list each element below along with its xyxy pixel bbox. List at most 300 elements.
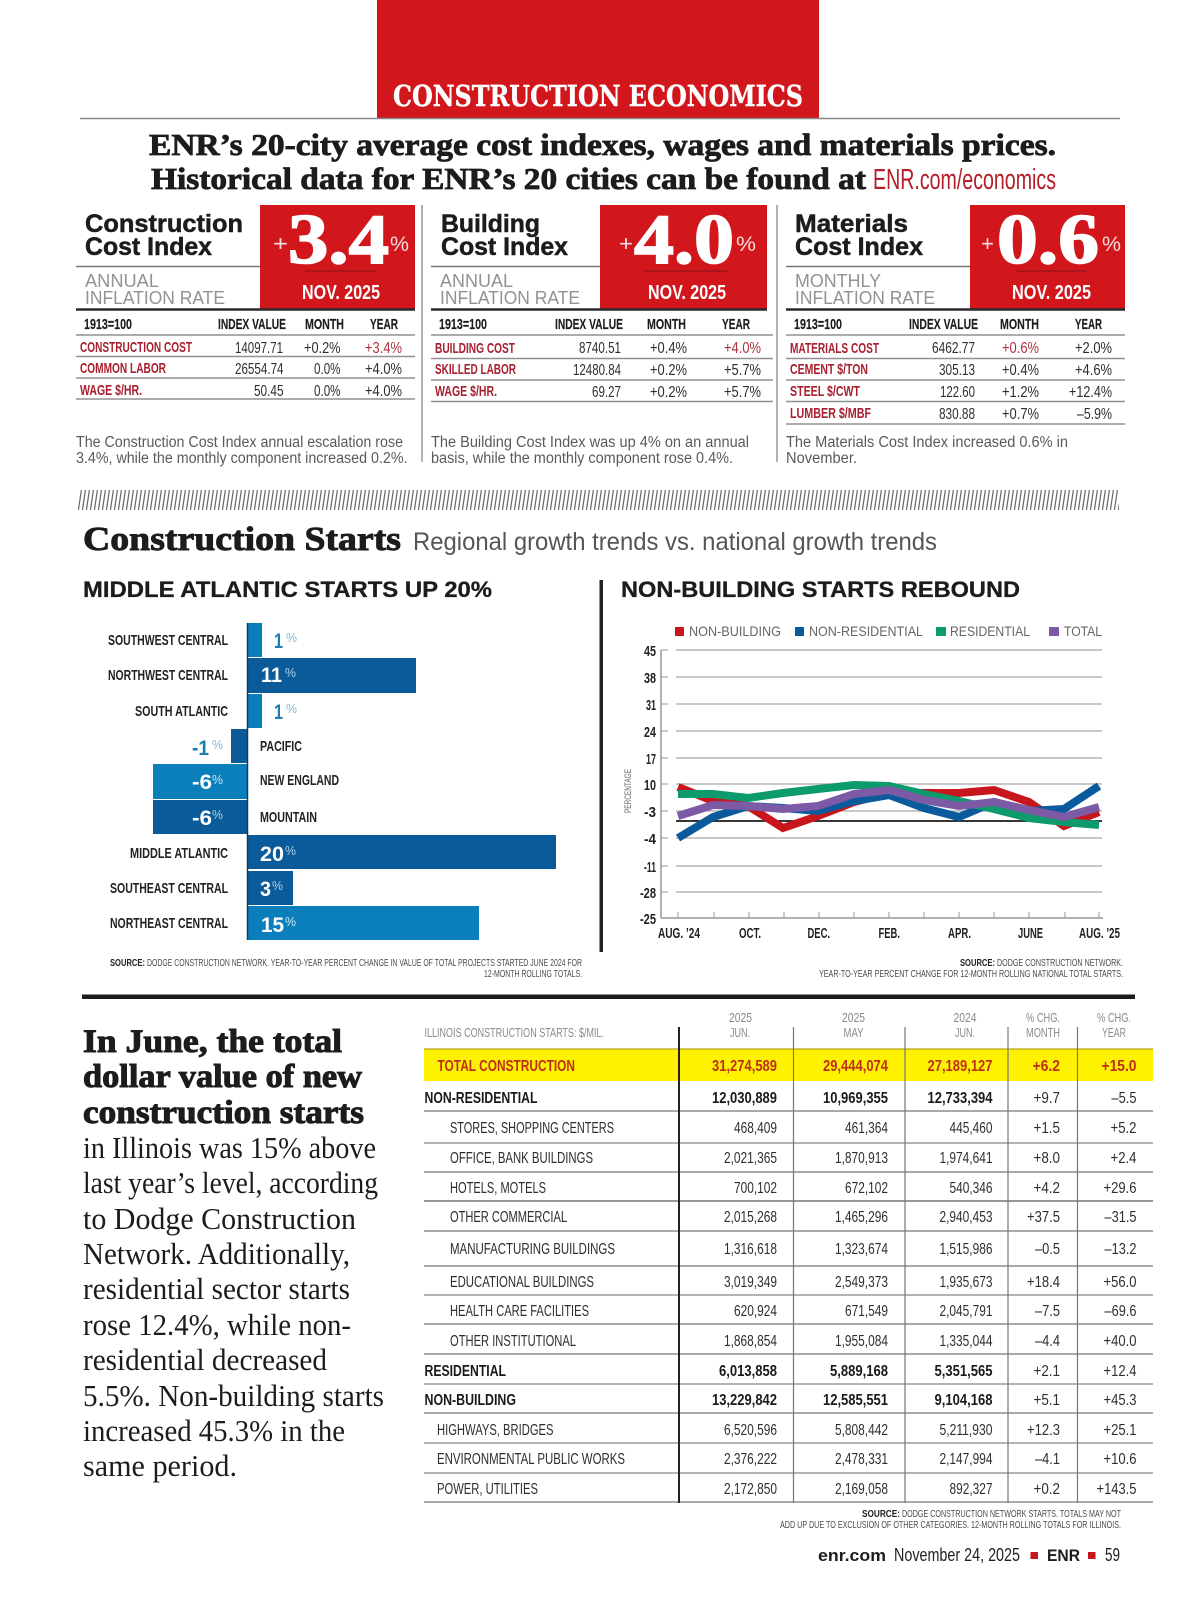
callout: +0.6% Nov. 2025 [970,201,1125,310]
data table: construction cost: MONTH [305,316,344,333]
data table: materials cost: 305.13 [939,362,975,379]
row: residential: +2.1 [1034,1363,1060,1380]
data table: materials cost: INDEX VALUE [909,316,978,333]
text block: Illinois summary [83,1024,384,1483]
callout: +3.4% Nov. 2025: NOV. 2025 [302,282,380,304]
data table: building cost: +4.0% [724,340,761,357]
data table: materials cost: MONTH [1000,316,1039,333]
table header: % CHG. [1097,1010,1131,1025]
data table: materials cost: +12.4% [1069,384,1112,401]
rate label: annual inflation rate [85,270,225,308]
callout: +0.6% Nov. 2025: 0.6 [997,201,1099,279]
source: bar chart: DODGE CONSTRUCTION NETWORK. YEAR-TO-YEAR PERCENT CHANGE IN VALUE OF TOTAL PROJECTS STARTED JUNE 2024 FOR [147,957,582,969]
source: bar chart: SOURCE: [110,957,145,969]
text block: Illinois summary: in Illinois was 15% above [83,1130,376,1165]
data table: building cost: SKILLED LABOR [435,361,516,378]
row: hotels [450,1180,1137,1197]
bar chart: regional starts: -6 [192,771,212,794]
row: hotels: 700,102 [734,1180,777,1197]
rate label: annual inflation rate [440,270,580,308]
table rules [424,1027,1153,1503]
panel: building cost index [431,201,773,467]
row: power: 2,172,850 [724,1481,777,1498]
bar chart: regional starts: % [272,878,283,893]
footer: ENR [1047,1546,1080,1565]
row: office: 1,974,641 [940,1150,993,1167]
row: other commercial: –31.5 [1104,1209,1137,1226]
bar chart: regional starts: % [286,701,297,716]
data table: building cost: +0.2% [650,384,687,401]
row: non-building: NON-BUILDING [424,1392,516,1409]
bar chart: regional starts: 20 [260,843,284,866]
bar chart: regional starts: 1 [274,701,283,724]
callout: +0.6% Nov. 2025: % [1102,233,1121,256]
row: non-residential: 12,030,889 [712,1090,777,1107]
bar chart: regional starts: NORTHWEST CENTRAL [108,667,228,684]
data table: construction cost: 14097.71 [235,340,283,357]
row: environmental: +10.6 [1104,1451,1137,1468]
headline: Historical data for ENR’s 20 cities can be found at [151,161,867,196]
row: environmental [437,1451,1137,1468]
panel title: building cost index: Cost Index [441,233,568,261]
data table: construction cost: +0.2% [304,340,340,357]
bar chart: regional starts: % [212,772,223,787]
line chart: national starts: AUG. ’25 [1079,926,1120,942]
panel title: building cost index [441,210,568,261]
source: line chart [819,957,1123,980]
data table: building cost: +0.4% [650,340,687,357]
section banner: construction economics: CONSTRUCTION ECONOMICS [393,79,803,113]
row: residential: 5,351,565 [934,1363,993,1380]
callout: +4.0% Nov. 2025: 4.0 [634,201,734,279]
line chart: national starts: DEC. [808,926,830,942]
data table: building cost: INDEX VALUE [555,316,623,333]
text block: Illinois summary: Network. Additionally, [83,1236,350,1271]
table header [424,1010,1131,1040]
row: non-building: 9,104,168 [934,1392,993,1409]
row: environmental: 2,376,222 [724,1451,777,1468]
table header: % CHG. [1026,1010,1060,1025]
callout: +4.0% Nov. 2025: + [619,231,633,256]
row: non-building: +45.3 [1104,1392,1137,1409]
bar chart: regional starts: SOUTHEAST CENTRAL [110,880,228,897]
row: non-residential: 12,733,394 [928,1090,993,1107]
text block: Illinois summary: to Dodge Construction [83,1201,356,1236]
line chart: national starts: -4 [644,832,656,848]
bar chart: regional starts: 3 [260,878,271,901]
row: manufacturing: MANUFACTURING BUILDINGS [450,1241,615,1258]
row: health care: –7.5 [1035,1303,1060,1320]
highlighted row: total construction: +6.2 [1032,1058,1060,1075]
row: hotels: HOTELS, MOTELS [450,1180,546,1197]
row: other institutional [450,1333,1137,1350]
bar chart: regional starts: 1 [274,630,283,653]
line chart: national starts [623,644,1120,942]
row: educational: +18.4 [1027,1274,1060,1291]
table header: 2025 [842,1010,865,1025]
table header: YEAR [1102,1025,1126,1040]
data table: materials cost: 830.88 [939,406,975,423]
row: highways: +25.1 [1104,1422,1137,1439]
row: residential: +12.4 [1104,1363,1137,1380]
bar chart: regional starts: MOUNTAIN [260,809,317,826]
table header: JUN. [955,1025,975,1040]
line chart: national starts: 45 [644,644,656,660]
row: manufacturing [450,1241,1137,1258]
legend: line chart: TOTAL [1064,623,1102,639]
bar chart: regional starts: PACIFIC [260,738,302,755]
bar chart: regional starts: NORTHEAST CENTRAL [110,915,228,932]
row: stores: +1.5 [1034,1120,1060,1137]
row: power: 892,327 [950,1481,993,1498]
data table: construction cost: 26554.74 [235,361,284,378]
section heading: construction starts: Construction Starts [83,521,401,558]
data table: construction cost: +4.0% [365,383,402,400]
row: manufacturing: 1,316,618 [724,1241,777,1258]
text block: Illinois summary: 5.5%. Non-building starts [83,1378,384,1413]
bar chart: regional starts: -6 [192,807,212,830]
bar chart: regional starts: % [212,807,223,822]
footer [818,1545,1120,1565]
callout: +4.0% Nov. 2025 [600,201,767,310]
data table: building cost: +5.7% [724,384,761,401]
data table: materials cost: MATERIALS COST [790,340,879,357]
row: stores: +5.2 [1110,1120,1137,1137]
data table: materials cost: 6462.77 [932,340,975,357]
data table: building cost: WAGE $/HR. [435,383,497,400]
row: non-building: 13,229,842 [712,1392,777,1409]
legend: line chart: NON-RESIDENTIAL [809,623,923,639]
row: office: +8.0 [1034,1150,1060,1167]
row: non-residential: 10,969,355 [823,1090,888,1107]
row: environmental: 2,147,994 [940,1451,993,1468]
text block: Illinois summary: In June, the total [83,1024,342,1060]
note: construction cost [76,434,408,467]
rate label: monthly inflation rate: INFLATION RATE [795,287,935,308]
row: other institutional: 1,868,854 [724,1333,777,1350]
row: power: +143.5 [1096,1481,1137,1498]
highlighted row: total construction: 27,189,127 [928,1058,993,1075]
callout: +3.4% Nov. 2025 [260,201,415,310]
data table: construction cost: 50.45 [254,383,284,400]
row: other institutional: 1,955,084 [835,1333,888,1350]
row: environmental: 2,478,331 [835,1451,888,1468]
row: highways: 5,808,442 [835,1422,888,1439]
line chart: national starts: FEB. [878,926,900,942]
section heading: construction starts: Regional growth trends vs. national growth trends [413,528,937,556]
line chart: national starts: 24 [644,725,656,741]
line chart: national starts: 10 [644,778,656,794]
line chart: national starts: 38 [644,671,656,687]
row: residential: 6,013,858 [719,1363,777,1380]
row: highways [437,1422,1137,1439]
row: non-residential [424,1090,1137,1107]
data table: materials cost: CEMENT $/TON [790,361,868,378]
row: stores: 468,409 [734,1120,777,1137]
row: residential: RESIDENTIAL [424,1363,506,1380]
bar chart: regional starts: % [286,630,297,645]
data table: materials cost: +4.6% [1075,362,1112,379]
data table: construction cost: +3.4% [365,340,402,357]
bar chart: regional starts: % [285,914,296,929]
row: educational: 3,019,349 [724,1274,777,1291]
line chart: national starts: OCT. [739,926,761,942]
bar chart: regional starts: % [285,665,296,680]
row: other institutional: –4.4 [1035,1333,1060,1350]
row: hotels: +29.6 [1104,1180,1137,1197]
footer: November 24, 2025 [894,1545,1020,1565]
data table: materials cost: +1.2% [1002,384,1039,401]
source: bar chart: 12-MONTH ROLLING TOTALS. [484,968,582,980]
row: power [437,1481,1137,1498]
line chart: national starts: 17 [646,752,656,768]
row: manufacturing: –13.2 [1104,1241,1137,1258]
row: hotels: 540,346 [950,1180,993,1197]
data table: building cost: YEAR [722,316,750,333]
data table: materials cost: 122.60 [940,384,975,401]
highlighted row: total construction [424,1049,1153,1081]
data table: construction cost: YEAR [370,316,398,333]
row: other institutional: OTHER INSTITUTIONAL [450,1333,576,1350]
bar chart: regional starts: MIDDLE ATLANTIC [130,845,228,862]
row: health care: 620,924 [734,1303,777,1320]
row: other commercial: 2,940,453 [940,1209,993,1226]
data table: construction cost [76,316,415,400]
data table: building cost: 8740.51 [579,340,621,357]
row: power: +0.2 [1034,1481,1060,1498]
legend: line chart: RESIDENTIAL [950,623,1030,639]
headline: ENR.com/economics [873,164,1056,196]
row: power: POWER, UTILITIES [437,1481,538,1498]
text block: Illinois summary: same period. [83,1448,237,1483]
row: educational: 2,549,373 [835,1274,888,1291]
bar chart: regional starts: NEW ENGLAND [260,772,339,789]
line chart: national starts: APR. [948,926,971,942]
row: non-building [424,1392,1137,1409]
row: highways: 5,211,930 [940,1422,993,1439]
data table: materials cost: LUMBER $/MBF [790,405,871,422]
data table: materials cost: 1913=100 [794,316,842,333]
row: residential [424,1363,1137,1380]
text block: Illinois summary: increased 45.3% in the [83,1413,345,1448]
panel title: materials cost index [795,210,923,261]
bar chart: regional starts: 11 [261,664,282,687]
row: non-residential: +9.7 [1034,1090,1060,1107]
data table: building cost: 1913=100 [439,316,487,333]
footer: 59 [1105,1545,1120,1565]
row: office: 1,870,913 [835,1150,888,1167]
row: health care: 671,549 [845,1303,888,1320]
data table: construction cost: 1913=100 [84,316,132,333]
line chart: national starts: 31 [646,698,656,714]
table header: JUN. [730,1025,750,1040]
line chart: national starts: -25 [640,912,656,928]
panel: construction cost index [76,201,415,467]
row: educational [450,1274,1137,1291]
row: health care: 2,045,791 [940,1303,993,1320]
rate label: annual inflation rate: INFLATION RATE [440,287,580,308]
row: other institutional: +40.0 [1104,1333,1137,1350]
bar chart: regional starts: % [212,737,223,752]
row: non-building: 12,585,551 [823,1392,888,1409]
line chart: national starts: JUNE [1018,926,1043,942]
data table: construction cost: INDEX VALUE [218,316,286,333]
line chart: national starts: AUG. ’24 [658,926,700,942]
row: manufacturing: –0.5 [1035,1241,1060,1258]
bar chart: regional starts: SOUTH ATLANTIC [135,703,228,720]
row: other commercial [450,1209,1137,1226]
row: office: 2,021,365 [724,1150,777,1167]
row: office [450,1150,1137,1167]
data table: construction cost: +4.0% [365,361,402,378]
data table: construction cost: WAGE $/HR. [80,382,142,399]
data table: building cost: 69.27 [592,384,621,401]
row: power: 2,169,058 [835,1481,888,1498]
source: line chart: DODGE CONSTRUCTION NETWORK. [997,957,1123,969]
text block: Illinois summary: rose 12.4%, while non- [83,1307,351,1342]
row: other institutional: 1,335,044 [940,1333,993,1350]
rate label: annual inflation rate: INFLATION RATE [85,287,225,308]
section heading: construction starts [83,521,937,558]
row: non-building: +5.1 [1034,1392,1060,1409]
note: materials cost: The Materials Cost Index increased 0.6% in [786,434,1068,451]
row: educational: +56.0 [1104,1274,1137,1291]
text block: Illinois summary: residential decreased [83,1342,327,1377]
table header: 2024 [954,1010,976,1025]
row: health care: –69.6 [1104,1303,1137,1320]
data table: construction cost: COMMON LABOR [80,360,166,377]
row: highways: HIGHWAYS, BRIDGES [437,1422,554,1439]
line chart: national starts: PERCENTAGE [623,769,633,813]
callout: +3.4% Nov. 2025: + [273,231,288,256]
note: materials cost: November. [786,450,857,467]
row: residential: 5,889,168 [830,1363,888,1380]
highlighted row: total construction: 29,444,074 [823,1058,888,1075]
row: environmental: –4.1 [1035,1451,1060,1468]
data table: building cost: +5.7% [724,362,761,379]
source: table [780,1508,1121,1531]
row: manufacturing: 1,323,674 [835,1241,888,1258]
source: line chart: SOURCE: [960,957,995,969]
row: other commercial: +37.5 [1027,1209,1060,1226]
line chart: national starts: -28 [640,886,656,902]
legend: line chart [675,623,1102,639]
source: table: SOURCE: [862,1508,900,1520]
panel title: construction cost index [85,210,243,261]
row: hotels: +4.2 [1034,1180,1060,1197]
headline: ENR’s 20-city average cost indexes, wages and materials prices. [149,127,1056,162]
row: non-residential: NON-RESIDENTIAL [424,1090,538,1107]
callout: +4.0% Nov. 2025: NOV. 2025 [648,282,726,304]
row: health care: HEALTH CARE FACILITIES [450,1303,589,1320]
row: manufacturing: 1,515,986 [940,1241,993,1258]
rate label: annual inflation rate: ANNUAL [85,270,159,291]
source: bar chart [110,957,582,980]
panel title: materials cost index: Materials [795,210,908,238]
row: educational: EDUCATIONAL BUILDINGS [450,1274,594,1291]
data table: construction cost: 0.0% [314,361,340,378]
row: stores: 445,460 [950,1120,993,1137]
note: building cost [431,434,749,467]
callout: +0.6% Nov. 2025: NOV. 2025 [1012,282,1091,304]
legend: line chart: NON-BUILDING [689,623,781,639]
row: other commercial: 2,015,268 [724,1209,777,1226]
table header: ILLINOIS CONSTRUCTION STARTS: $/MIL. [424,1025,604,1040]
line chart: national starts: -11 [644,860,656,876]
data table: construction cost: CONSTRUCTION COST [80,339,192,356]
row: office: OFFICE, BANK BUILDINGS [450,1150,593,1167]
text block: Illinois summary: last year’s level, according [83,1165,378,1200]
row: hotels: 672,102 [845,1180,888,1197]
highlighted row: total construction: 31,274,589 [712,1058,777,1075]
data table: materials cost: +0.6% [1002,340,1039,357]
data table: building cost: 12480.84 [573,362,621,379]
bar chart: regional starts: SOUTHWEST CENTRAL [108,632,228,649]
section banner: construction economics [377,0,819,118]
text block: Illinois summary: residential sector starts [83,1271,350,1306]
bar chart: regional starts [108,623,556,940]
footer: enr.com [818,1546,886,1565]
data table: building cost: BUILDING COST [435,340,515,357]
table header: 2025 [729,1010,752,1025]
row: highways: +12.3 [1027,1422,1060,1439]
table: Illinois construction starts [424,1010,1153,1503]
bar chart: regional starts: % [285,843,296,858]
row: stores: STORES, SHOPPING CENTERS [450,1120,614,1137]
callout: +3.4% Nov. 2025: % [390,233,409,256]
row: health care [450,1303,1137,1320]
bar chart: regional starts: 15 [261,914,284,937]
row: stores: 461,364 [845,1120,888,1137]
highlighted row: total construction: +15.0 [1102,1058,1137,1075]
chart heading: middle atlantic: MIDDLE ATLANTIC STARTS UP 20% [83,577,492,602]
callout: +0.6% Nov. 2025: + [981,231,994,256]
data table: building cost: +0.2% [650,362,687,379]
note: building cost: basis, while the monthly component rose 0.4%. [431,450,733,467]
text block: Illinois summary: construction starts [83,1095,364,1131]
bar chart: regional starts: -1 [192,737,209,760]
callout: +3.4% Nov. 2025: 3.4 [288,201,389,279]
panel: materials cost index [786,201,1125,467]
panel title: construction cost index: Cost Index [85,233,212,261]
data table: materials cost: STEEL $/CWT [790,383,860,400]
data table: materials cost: YEAR [1075,316,1102,333]
data table: materials cost: +0.7% [1002,406,1039,423]
data table: building cost [431,316,773,402]
row: other commercial: OTHER COMMERCIAL [450,1209,567,1226]
row: highways: 6,520,596 [724,1422,777,1439]
data table: materials cost: +0.4% [1002,362,1039,379]
row: non-residential: –5.5 [1112,1090,1137,1107]
panel title: materials cost index: Cost Index [795,233,923,261]
note: construction cost: The Construction Cost Index annual escalation rose [76,434,403,451]
chart heading: non-building: NON-BUILDING STARTS REBOUND [621,577,1020,602]
panel title: building cost index: Building [441,210,540,238]
row: environmental: ENVIRONMENTAL PUBLIC WORKS [437,1451,625,1468]
note: construction cost: 3.4%, while the monthly component increased 0.2%. [76,450,408,467]
row: stores [450,1120,1137,1137]
data table: construction cost: 0.0% [314,383,340,400]
data table: materials cost: +2.0% [1075,340,1112,357]
rate label: monthly inflation rate [795,270,935,308]
row: office: +2.4 [1110,1150,1137,1167]
row: educational: 1,935,673 [940,1274,993,1291]
table header: MONTH [1026,1025,1060,1040]
rate label: annual inflation rate: ANNUAL [440,270,513,291]
data table: materials cost: –5.9% [1077,406,1112,423]
note: materials cost [786,434,1068,467]
table header: MAY [844,1025,864,1040]
